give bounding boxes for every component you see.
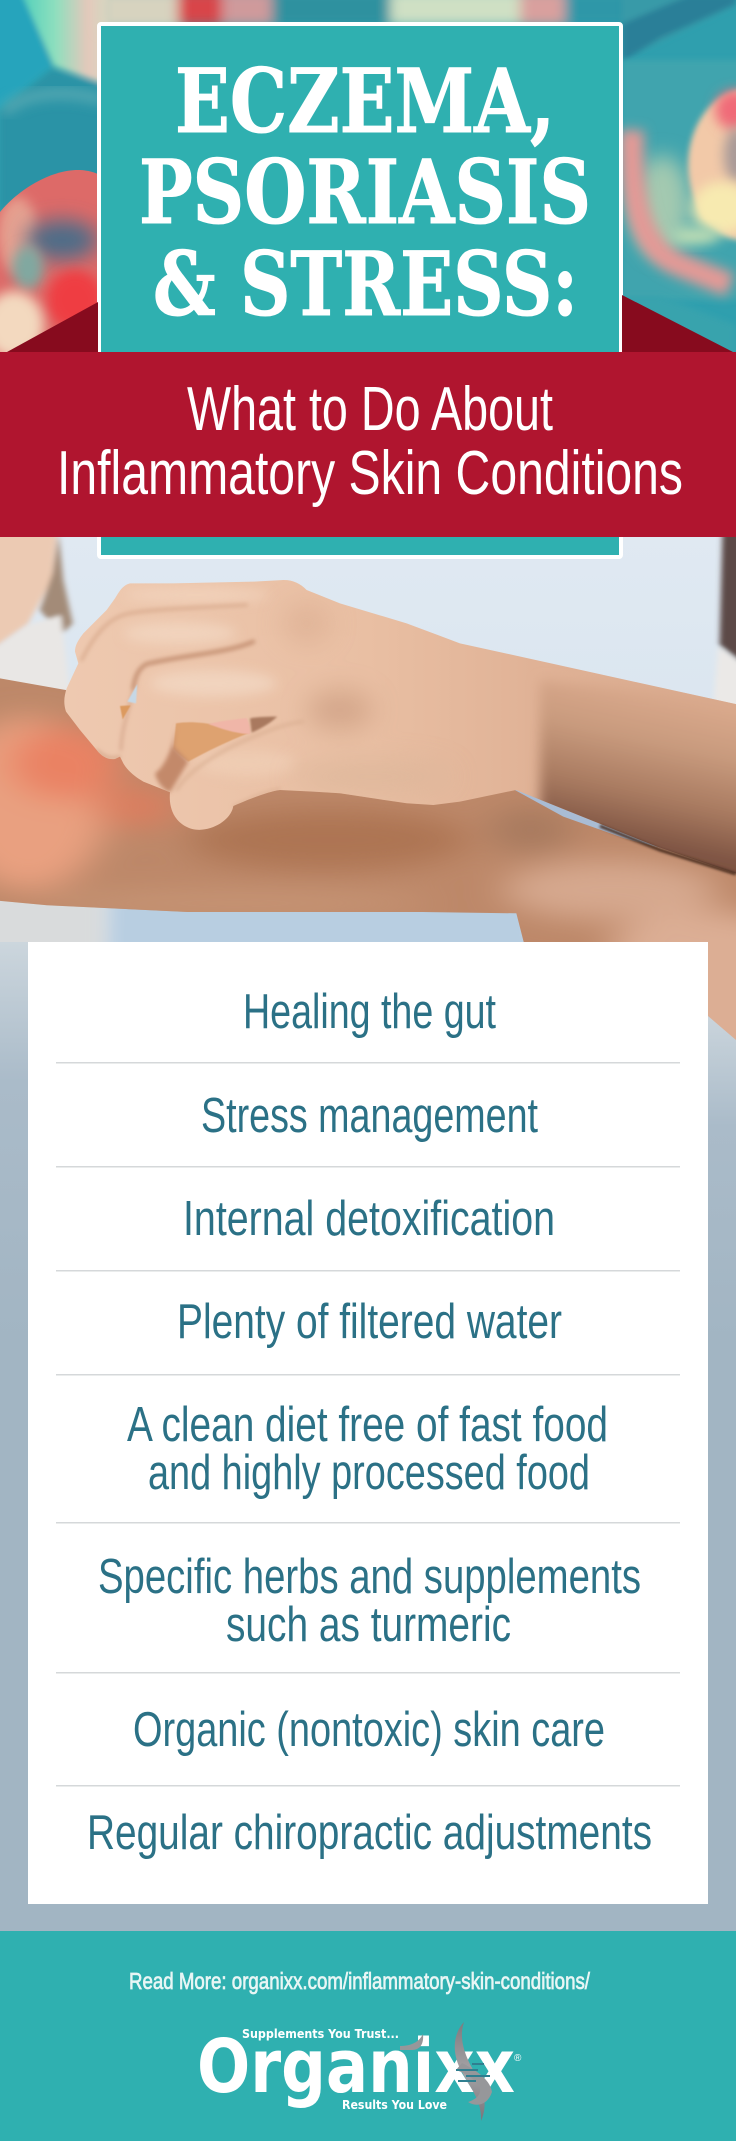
title heading bbox=[139, 49, 591, 336]
left arm and background bbox=[0, 537, 736, 704]
title heading: ECZEMA, bbox=[175, 49, 555, 153]
logo: Organixx: ® bbox=[514, 2053, 522, 2064]
title panel bbox=[99, 24, 621, 557]
right side cell bbox=[622, 0, 736, 62]
shadow line under upper forearm bbox=[600, 826, 736, 874]
panel: list of remedies: Internal detoxification bbox=[183, 1192, 555, 1246]
panel: list of remedies: Stress management bbox=[201, 1089, 538, 1143]
panel: list of remedies: Healing the gut bbox=[243, 985, 496, 1039]
panel: list of remedies: and highly processed food bbox=[148, 1446, 590, 1500]
scratched forearm bbox=[0, 678, 736, 942]
panel: list of remedies: such as turmeric bbox=[226, 1598, 511, 1652]
logo: Organixx: Supplements You Trust... bbox=[242, 2027, 399, 2041]
logo: Organixx: Results You Love bbox=[342, 2098, 447, 2112]
shirt below arm bbox=[0, 901, 524, 942]
red banner with subtitle: What to Do About bbox=[187, 375, 553, 444]
panel: list of remedies bbox=[28, 942, 708, 1904]
footer band bbox=[0, 1931, 736, 2141]
title heading: & STRESS: bbox=[153, 232, 578, 336]
title heading: PSORIASIS bbox=[139, 140, 591, 244]
logo: Organixx: Organixx bbox=[197, 2024, 515, 2110]
panel: list of remedies: Plenty of filtered water bbox=[177, 1295, 562, 1349]
background: lower gradient behind list bbox=[0, 1040, 736, 1931]
lower-left red cell bbox=[0, 170, 97, 352]
gap between fingers bbox=[173, 722, 250, 762]
ribbon fold right bbox=[622, 295, 733, 352]
panel: list of remedies: A clean diet free of fast food bbox=[127, 1398, 608, 1452]
panel: list of remedies: Organic (nontoxic) skin care bbox=[133, 1703, 605, 1757]
ribbon fold left bbox=[7, 302, 98, 352]
forearm shading bbox=[540, 680, 736, 887]
photo: forearm at panel right bbox=[708, 940, 736, 1040]
knuckle and finger light and shade bbox=[129, 588, 287, 772]
sleeve sliver bbox=[512, 788, 662, 848]
scratching hand bbox=[53, 570, 736, 887]
background image: magnified skin cells bbox=[0, 0, 736, 360]
photo: hand scratching forearm bbox=[0, 537, 736, 942]
read more link: Read More: organixx.com/inflammatory-skin-conditions/ bbox=[129, 1968, 590, 1994]
red banner with subtitle bbox=[0, 352, 736, 537]
